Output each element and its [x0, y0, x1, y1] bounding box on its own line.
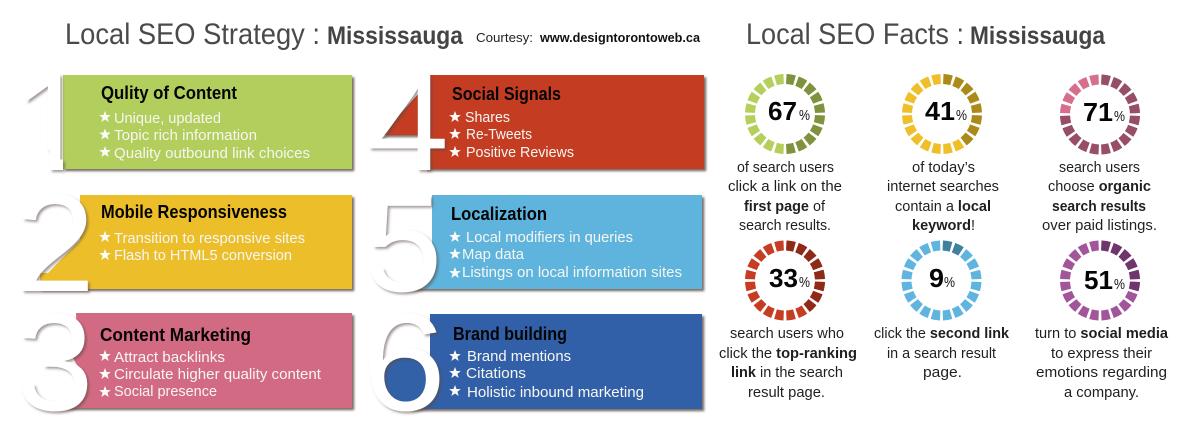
panel: 2 mobile responsiveness: Mobile Responsiveness	[101, 202, 287, 222]
fact: 71 percent: over paid listings.	[1042, 217, 1157, 234]
fact: 41 percent: contain a local	[895, 198, 991, 215]
title: local SEO facts	[746, 18, 1106, 51]
panel: 1 quality of content: Topic rich information	[114, 127, 257, 144]
fact: 33 percent: %	[799, 274, 810, 291]
panel: 1 quality of content: Qulity of Content	[101, 83, 237, 103]
fact: 67 percent: of search users	[737, 159, 834, 176]
fact: 33 percent: 33	[769, 263, 798, 293]
fact: 33 percent: result page.	[748, 384, 825, 401]
fact: 67 percent: click a link on the	[728, 178, 842, 195]
panel: 5 localization: Localization	[451, 204, 547, 224]
fact: 71 percent: 71	[1083, 97, 1113, 127]
fact: 41 percent	[887, 79, 999, 234]
fact: 51 percent: emotions regarding	[1036, 364, 1167, 381]
panel: 4 social signals: Positive Reviews	[466, 144, 574, 161]
panel: 1 quality of content	[27, 75, 356, 174]
fact: 67 percent: 67	[768, 96, 797, 126]
panel: 6 brand building: Holistic inbound marketing	[467, 384, 644, 401]
panel: 3 content marketing: Social presence	[114, 383, 217, 400]
fact: 51 percent: 51	[1084, 265, 1113, 295]
fact: 33 percent	[719, 246, 857, 401]
panel: 5 localization: 5	[365, 166, 442, 321]
panel: 2 mobile responsiveness: Transition to responsive sites	[114, 230, 305, 247]
fact: 9 percent: click the second link	[874, 325, 1010, 342]
fact: 51 percent: %	[1114, 276, 1125, 293]
fact: 33 percent: search users who	[730, 325, 844, 342]
panel: 1 quality of content: Quality outbound link choices	[114, 145, 310, 162]
fact: 9 percent: in a search result	[887, 345, 997, 362]
panel: 4 social signals: Re-Tweets	[466, 126, 532, 143]
panel: 5 localization: Listings on local information sites	[462, 264, 682, 281]
courtesy credit: www.designtorontoweb.ca	[539, 30, 701, 45]
panel: 3 content marketing: Attract backlinks	[114, 349, 225, 366]
panel: 3 content marketing: 3	[16, 285, 93, 440]
fact: 71 percent: search results	[1052, 198, 1146, 215]
fact: 67 percent	[728, 79, 842, 234]
fact: 51 percent: a company.	[1064, 384, 1139, 401]
fact: 9 percent: page.	[923, 364, 962, 381]
panel: 1 quality of content: 1	[13, 45, 90, 200]
panel: 1 quality of content: Unique, updated	[114, 110, 221, 127]
panel: 3 content marketing: Content Marketing	[100, 325, 251, 345]
fact: 67 percent: first page of	[744, 198, 826, 215]
fact: 71 percent: choose organic	[1048, 178, 1151, 195]
panel: 6 brand building	[362, 285, 702, 440]
fact: 9 percent: %	[944, 274, 955, 291]
panel: 4 social signals: Shares	[465, 109, 510, 126]
fact: 67 percent: search results.	[739, 217, 831, 234]
fact: 71 percent	[1042, 80, 1157, 234]
title: local SEO facts: Local SEO Facts :	[746, 18, 964, 51]
panel: 2 mobile responsiveness: 2	[15, 166, 95, 321]
fact: 67 percent: %	[799, 107, 810, 124]
fact: 41 percent: %	[956, 107, 967, 124]
fact: 9 percent	[874, 246, 1010, 381]
fact: 33 percent: click the top-ranking	[719, 345, 857, 362]
panel: 6 brand building: Brand mentions	[467, 348, 571, 365]
panel: 2 mobile responsiveness: Flash to HTML5 conversion	[114, 247, 292, 264]
fact: 41 percent: 41	[925, 96, 955, 126]
panel: 2 mobile responsiveness	[15, 166, 352, 321]
panel: 5 localization: Local modifiers in queries	[466, 229, 633, 246]
title: local SEO strategy: Mississauga	[327, 22, 464, 50]
fact: 51 percent: to express their	[1051, 345, 1152, 362]
fact: 9 percent: 9	[929, 263, 944, 293]
fact: 51 percent	[1035, 246, 1169, 401]
panel: 3 content marketing: Circulate higher quality content	[114, 366, 322, 383]
title: local SEO strategy: Local SEO Strategy :	[65, 18, 320, 51]
panel: 5 localization: Map data	[462, 246, 525, 263]
panel: 4 social signals	[366, 45, 704, 200]
panel: 6 brand building: Brand building	[453, 324, 567, 344]
fact: 41 percent: internet searches	[887, 178, 999, 195]
fact: 71 percent: search users	[1059, 159, 1140, 176]
courtesy credit: Courtesy:	[476, 30, 533, 45]
fact: 71 percent: %	[1114, 108, 1125, 125]
title: local SEO facts: Mississauga	[970, 22, 1106, 50]
fact: 51 percent: turn to social media	[1035, 325, 1169, 342]
panel: 6 brand building: Citations	[466, 365, 526, 382]
panel: 4 social signals: 4	[366, 45, 449, 200]
fact: 33 percent: link in the search	[731, 364, 843, 381]
panel: 5 localization	[365, 166, 702, 321]
panel: 4 social signals: Social Signals	[452, 84, 561, 104]
panel: 3 content marketing	[16, 285, 352, 440]
fact: 41 percent: keyword!	[912, 217, 975, 234]
fact: 41 percent: of today’s	[912, 159, 975, 176]
panel: 6 brand building: 6	[362, 285, 446, 440]
